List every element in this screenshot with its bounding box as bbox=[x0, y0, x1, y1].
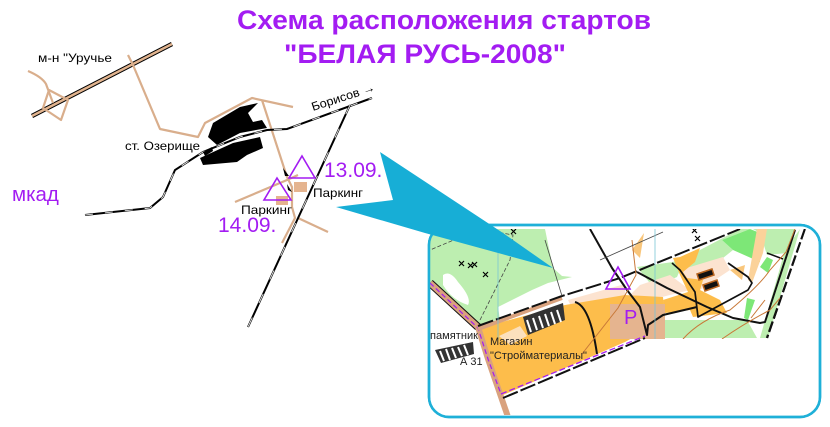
date labels bbox=[218, 159, 382, 237]
highway A31 bbox=[430, 283, 562, 417]
green forest bbox=[430, 229, 572, 327]
detail labels: А 31 bbox=[460, 356, 483, 368]
overview labels: Борисов → bbox=[310, 80, 377, 114]
panel: detail map bbox=[429, 225, 820, 417]
hatched buildings bbox=[435, 303, 565, 363]
label: мкад: мкад bbox=[12, 183, 59, 206]
arrow: pointer to detail map bbox=[336, 152, 553, 268]
title bbox=[237, 5, 651, 69]
bright green patches bbox=[722, 229, 773, 320]
parking squares bbox=[276, 182, 307, 205]
panel border bbox=[429, 225, 820, 417]
overview labels: Паркинг bbox=[241, 203, 293, 217]
panel frame fill bbox=[429, 225, 820, 417]
date labels: 14.09. bbox=[218, 214, 276, 237]
main highway to Uruchye bbox=[32, 44, 172, 116]
thin grey lines and crosses bbox=[430, 229, 663, 340]
railway south bbox=[248, 105, 350, 327]
detail labels: памятник bbox=[430, 330, 478, 342]
start triangle bbox=[606, 267, 630, 289]
purple boundary bbox=[501, 336, 645, 394]
railway to Borisov bbox=[85, 98, 372, 215]
parking rectangle bbox=[610, 304, 665, 339]
overview labels: ст. Озерище bbox=[125, 139, 200, 153]
small houses bbox=[499, 326, 527, 345]
station mark bbox=[203, 147, 213, 156]
black roads and tracks bbox=[478, 229, 805, 398]
dotted pale areas bbox=[568, 257, 730, 308]
date labels: 13.09. bbox=[324, 159, 382, 182]
detailed map content bbox=[430, 228, 805, 417]
overview labels bbox=[38, 51, 377, 217]
title: "БЕЛАЯ РУСЬ-2008" bbox=[284, 39, 566, 69]
overview labels: м-н "Уручье bbox=[38, 51, 112, 65]
overview map bbox=[28, 44, 382, 327]
tan local roads bbox=[28, 55, 328, 243]
title: Схема расположения стартов bbox=[237, 5, 651, 35]
detail labels bbox=[430, 333, 586, 365]
parking letter: P bbox=[624, 307, 637, 329]
overview labels: Паркинг bbox=[313, 186, 364, 200]
arrow marks bbox=[283, 168, 292, 192]
black industrial blocks bbox=[208, 103, 267, 145]
white clearings bbox=[443, 274, 572, 320]
detail labels: "Стройматериалы" bbox=[490, 350, 587, 362]
brown contours bbox=[582, 229, 795, 354]
start triangle 13.09 bbox=[289, 156, 315, 178]
detail labels: Магазин bbox=[490, 336, 532, 348]
start triangle 14.09 bbox=[264, 178, 291, 200]
orange areas bbox=[480, 295, 665, 395]
